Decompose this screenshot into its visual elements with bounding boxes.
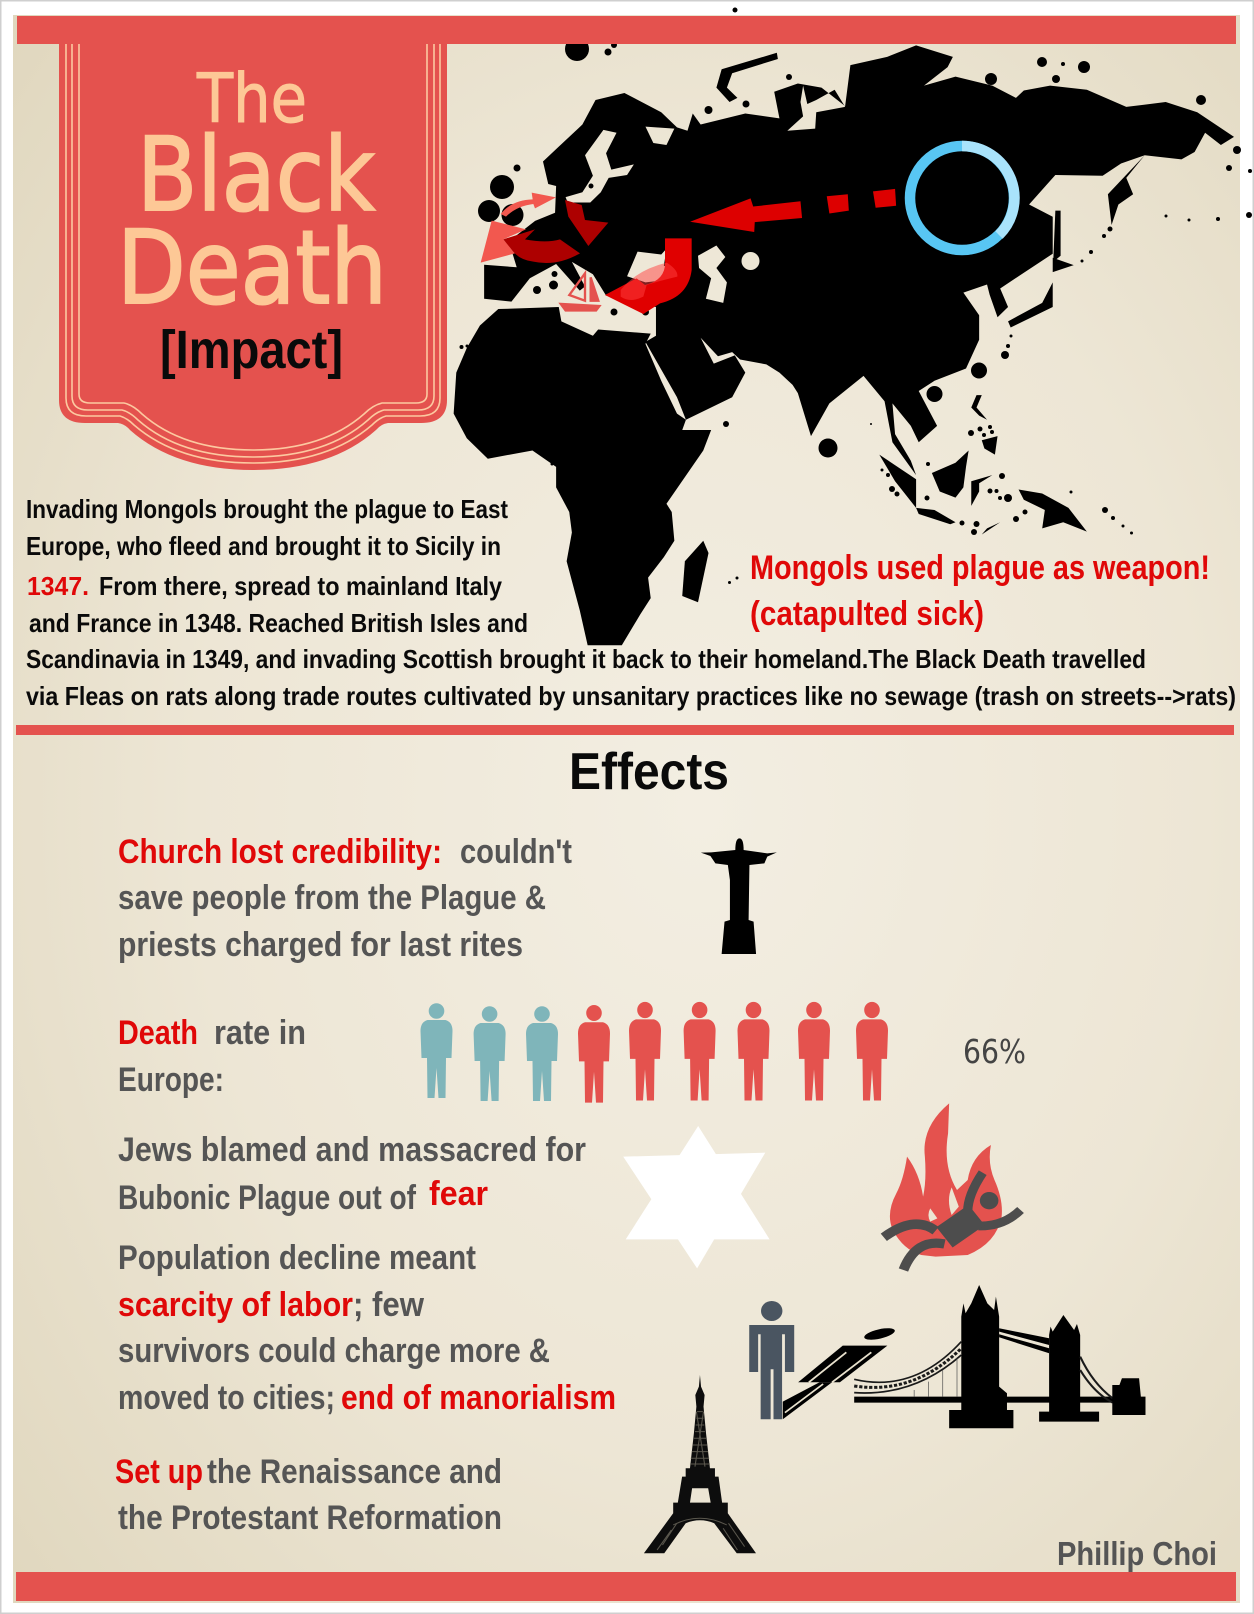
effect text: Renaissance: Set up xyxy=(115,1453,203,1491)
arrow: light red head at Iberia xyxy=(481,221,526,263)
effect text: death rate: Europe: xyxy=(118,1061,224,1099)
highlight on U-turn arrow xyxy=(621,263,677,300)
intro paragraph: Europe, who fleed and brought it to Sicily in xyxy=(26,531,501,561)
title banner xyxy=(59,44,447,470)
icon: Eiffel Tower xyxy=(644,1375,756,1553)
effect text: labor: survivors could charge more & xyxy=(118,1332,550,1370)
effect text: Renaissance xyxy=(115,1453,502,1537)
effect text: Jews blamed: Bubonic Plague out of xyxy=(118,1179,417,1217)
intro paragraph: and France in 1348. Reached British Isles and xyxy=(29,608,528,638)
effect text: Jews blamed: Jews blamed and massacred for xyxy=(118,1131,586,1169)
dashed arrow heading west xyxy=(690,189,896,232)
title text: The xyxy=(196,60,307,139)
end building xyxy=(1112,1378,1145,1415)
arrow: dark red curved over France xyxy=(503,229,580,263)
title text xyxy=(117,60,387,328)
effect text: death rate: Death xyxy=(118,1014,198,1052)
flame inner gaps xyxy=(928,1187,959,1222)
right suspension span xyxy=(1080,1357,1113,1403)
left suspension span xyxy=(854,1342,961,1397)
effect text: church: couldn't xyxy=(460,833,572,871)
standing man xyxy=(749,1301,794,1419)
lattice xyxy=(657,1412,745,1550)
effect text: Jews blamed xyxy=(118,1131,586,1217)
arrow: light red arc over Britain xyxy=(501,193,556,217)
tower silhouette xyxy=(644,1375,756,1553)
effect text: labor: end of manorialism xyxy=(341,1379,616,1417)
icon: figure falling into flames xyxy=(884,1103,1021,1270)
shadow xyxy=(783,1326,896,1419)
effect text: church: save people from the Plague & xyxy=(118,879,546,917)
intro paragraph: 1347. xyxy=(27,571,89,601)
survivors xyxy=(420,1003,558,1101)
arrow: bright red U-turn through Black Sea xyxy=(605,238,692,314)
effect text: labor: ; few xyxy=(353,1286,425,1324)
callout: plague as weapon xyxy=(750,549,1210,633)
effect text: labor: moved to cities; xyxy=(118,1379,335,1417)
flames xyxy=(890,1103,1002,1257)
subtitle: [Impact] xyxy=(160,320,343,380)
banner shield xyxy=(59,44,447,470)
islands and dots xyxy=(460,8,1252,584)
title text: Black xyxy=(137,116,375,235)
effect text: church xyxy=(118,833,572,964)
pictogram: nine people, six red xyxy=(420,1002,888,1103)
icon: red sailing ship xyxy=(558,273,602,312)
effect text: church: priests charged for last rites xyxy=(118,926,523,964)
falling figure xyxy=(884,1173,1021,1270)
intro paragraph: Invading Mongols brought the plague to East xyxy=(26,494,508,524)
effect text: labor: Population decline meant xyxy=(118,1239,476,1277)
author credit: Phillip Choi xyxy=(1057,1535,1217,1572)
effect text: death rate xyxy=(118,1014,306,1099)
right tower xyxy=(1039,1315,1099,1422)
effect text: labor xyxy=(118,1239,616,1417)
heading: Effects: Effects xyxy=(569,743,729,801)
arrow: dark red toward Central Europe xyxy=(565,200,608,246)
icon: Tower Bridge xyxy=(854,1285,1145,1428)
left tower xyxy=(949,1285,1013,1428)
banner inset lines xyxy=(66,44,440,463)
callout: plague as weapon: (catapulted sick) xyxy=(750,595,984,633)
Aral sea xyxy=(742,252,760,270)
upper walkway xyxy=(999,1328,1049,1353)
effect text: death rate: rate in xyxy=(214,1014,306,1052)
icon: white Star of David xyxy=(623,1126,770,1268)
spread arrows across Europe xyxy=(481,193,692,314)
intro paragraph xyxy=(26,494,1236,711)
deaths xyxy=(578,1002,888,1103)
statistic: 66%: 66% xyxy=(963,1032,1026,1071)
effect text: church: Church lost credibility: xyxy=(118,833,442,871)
landmass silhouettes xyxy=(454,45,1234,645)
top red bar xyxy=(17,16,1236,44)
bottom red bar xyxy=(16,1572,1236,1601)
icon: Christ statue xyxy=(701,838,777,954)
effect text: Renaissance: the Protestant Reformation xyxy=(118,1499,502,1537)
section divider xyxy=(16,725,1234,735)
origin ring in Asia xyxy=(910,146,1014,250)
effect text: Renaissance: the Renaissance and xyxy=(207,1453,502,1491)
effect text: labor: scarcity of labor xyxy=(118,1286,353,1324)
intro paragraph: From there, spread to mainland Italy xyxy=(99,571,502,601)
road deck xyxy=(854,1397,1113,1403)
title text: Death xyxy=(117,209,387,328)
effect text: Jews blamed: fear xyxy=(429,1175,488,1213)
world map: Eurasia and Africa xyxy=(454,8,1252,645)
icon: man with long shadow xyxy=(749,1301,896,1419)
